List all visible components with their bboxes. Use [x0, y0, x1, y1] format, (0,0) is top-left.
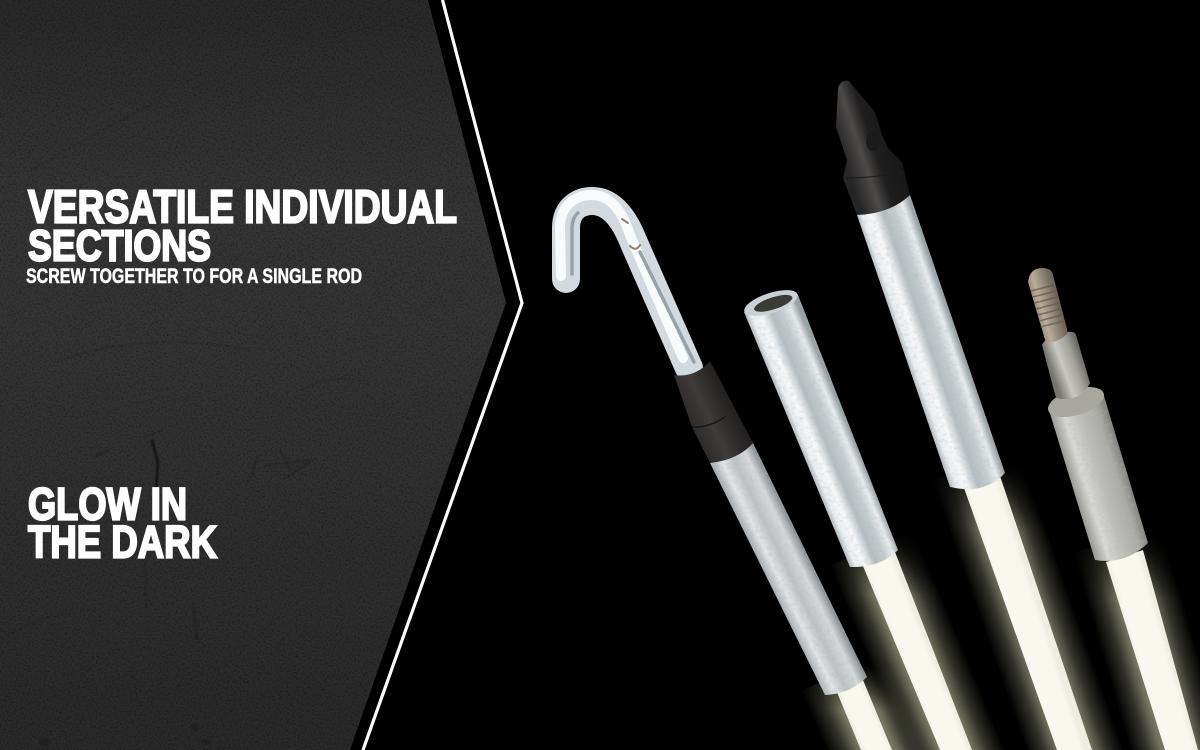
- white rod 3: [964, 476, 1092, 750]
- tip side hole: [866, 131, 880, 151]
- white rod 4: [1106, 550, 1198, 750]
- thread: [1028, 268, 1068, 343]
- rod 1: hook tool: [560, 195, 892, 750]
- heading: glow in the dark: [28, 478, 217, 568]
- glow halos behind rods: [806, 473, 1200, 750]
- heading: versatile individual sections: SECTIONS: [28, 222, 211, 270]
- black bullet tip: [836, 81, 910, 215]
- tip shoulder line: [843, 172, 905, 178]
- subheading: screw together: SCREW TOGETHER TO FOR A SINGLE ROD: [26, 265, 362, 288]
- heading: glow in the dark: GLOW IN: [28, 478, 187, 530]
- metal sleeve 3: [857, 195, 1005, 489]
- heading: versatile individual sections: [28, 180, 457, 270]
- white rod 2: [863, 552, 972, 750]
- sleeve rim: [1044, 381, 1108, 423]
- neck: [1042, 332, 1090, 399]
- heading: glow in the dark: THE DARK: [28, 516, 217, 568]
- thread grooves: [1031, 285, 1064, 327]
- tube opening: [741, 285, 801, 321]
- metal sleeve 1: [710, 443, 867, 695]
- arrow outline: [363, 0, 522, 750]
- metal sleeve 4: [1048, 396, 1148, 561]
- metal tube 2: [744, 295, 898, 567]
- rod 3: bullet tip: [836, 81, 1092, 750]
- rod 2: open tube: [741, 285, 972, 750]
- rod 4: threaded end: [1028, 268, 1198, 750]
- black collar: [674, 361, 753, 463]
- collar ridge: [692, 416, 726, 427]
- heading: versatile individual sections: VERSATILE INDIVIDUAL: [28, 180, 457, 232]
- panel: dark textured arrow panel: [0, 0, 510, 750]
- white rod 1: [836, 680, 892, 750]
- hook wire: [560, 195, 694, 368]
